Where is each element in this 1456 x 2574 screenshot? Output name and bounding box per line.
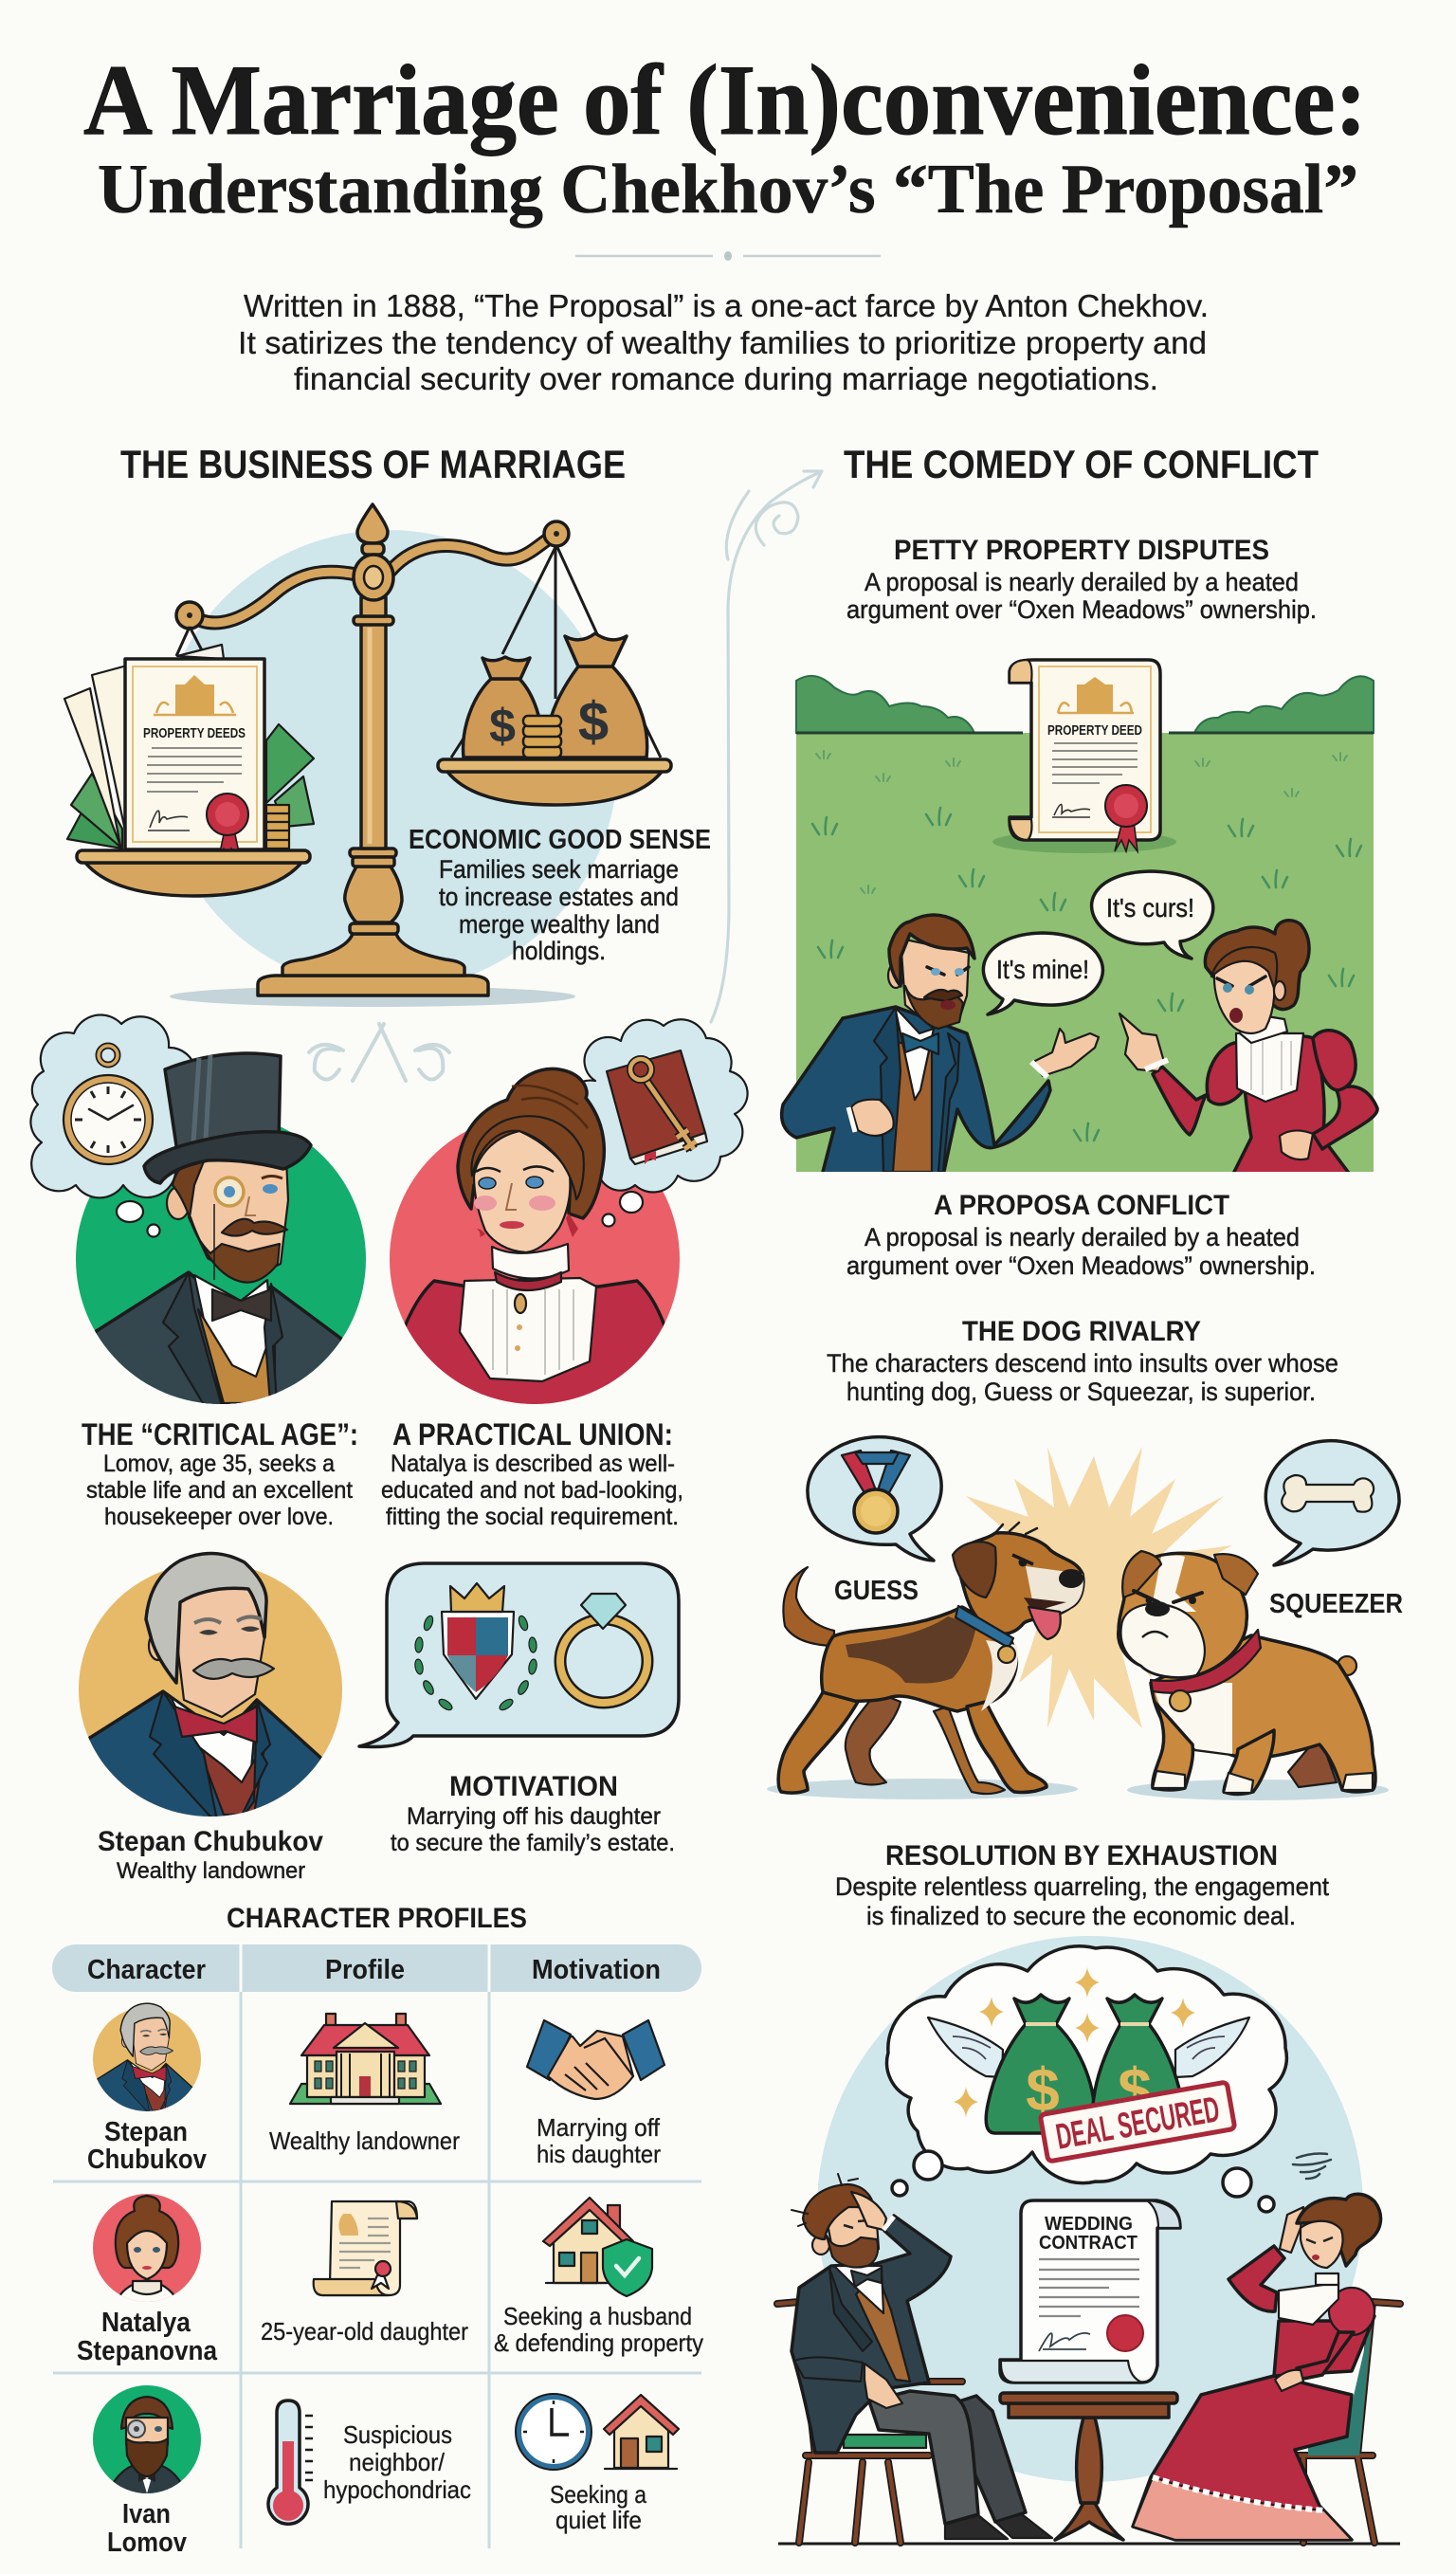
ring — [560, 1594, 647, 1703]
dog: Guess — [778, 1523, 1083, 1794]
text: a practical union: fitting the social requirement. — [386, 1504, 679, 1530]
text: the critical age: THE “CRITICAL AGE”: — [82, 1417, 358, 1451]
text: a practical union — [381, 1417, 683, 1530]
head — [1297, 2194, 1381, 2266]
text: marrying off his daughter — [537, 2113, 661, 2168]
text: the dog rivalry: THE DOG RIVALRY — [962, 1316, 1201, 1347]
text: a proposa conflict — [846, 1190, 1316, 1280]
top hat — [144, 1053, 311, 1183]
chair — [777, 2302, 962, 2543]
chair — [1295, 2302, 1400, 2543]
head and face — [167, 1159, 288, 1283]
dress — [1232, 1036, 1351, 1176]
wedding contract — [1000, 2200, 1180, 2382]
text: economic good sense: ECONOMIC GOOD SENSE — [409, 825, 711, 855]
arrow: flourish linking the two columns — [711, 471, 822, 1022]
text: seeking a husband: Seeking a husband — [503, 2302, 692, 2330]
text: a practical union: educated and not bad-looking, — [381, 1477, 683, 1504]
head — [888, 963, 903, 988]
intro text: financial security over romance during marriage negotiations. — [294, 361, 1158, 396]
text: resolution by exhaustion: RESOLUTION BY EXHAUSTION — [885, 1840, 1278, 1871]
right pan — [438, 759, 671, 805]
text: Stepan Chubukov: Stepan Chubukov — [98, 1826, 323, 1857]
text: suspicious neighbor: neighbor/ — [349, 2448, 446, 2476]
deal secured stamp — [1040, 2082, 1235, 2162]
illustration: balance scale — [64, 504, 671, 1007]
left pan contents: property deeds and money: PROPERTY DEEDS — [143, 726, 246, 741]
property deed scroll: PROPERTY DEED — [1047, 723, 1142, 739]
woman on chair — [1133, 2194, 1400, 2543]
hanging cords — [176, 545, 661, 758]
legs — [1224, 1730, 1274, 1794]
bodice and sleeves — [1274, 2316, 1374, 2376]
speech bubble: medal — [808, 1437, 941, 1561]
text: the critical age — [82, 1417, 358, 1530]
deal secured stamp: DEAL SECURED — [1053, 2090, 1223, 2158]
speech bubble: it's mine — [983, 933, 1102, 1014]
avatar: Lomov — [93, 2385, 201, 2495]
text: the critical age: housekeeper over love. — [104, 1504, 334, 1530]
right pan contents: money bags and coins: $ — [489, 700, 516, 753]
white chest — [1153, 1683, 1232, 1754]
head — [955, 1533, 1083, 1634]
thought cloud: deal secured: $ — [1118, 2055, 1152, 2124]
wings — [928, 2017, 1249, 2077]
red circle — [390, 1114, 680, 1404]
text: motivation — [391, 1771, 675, 1856]
bow tie — [851, 2268, 882, 2287]
text: petty property disputes: A proposal is nearly derailed by a heated — [864, 568, 1299, 596]
text: economic good sense: holdings. — [512, 937, 606, 965]
illustration: meadow dispute scene — [782, 660, 1377, 1176]
text: seeking a quiet life: Seeking a — [550, 2480, 646, 2509]
name: Natalya Stepanovna: Stepanovna — [77, 2336, 218, 2366]
name: Ivan Lomov: Lomov — [107, 2528, 187, 2558]
heading: the comedy of conflict: THE COMEDY OF CONFLICT — [844, 442, 1319, 486]
woman arguing — [1119, 921, 1377, 1176]
icon: clock and house — [516, 2394, 679, 2470]
starburst — [966, 1447, 1232, 1728]
table header row: Character — [87, 1955, 206, 1985]
illustration: resolution scene — [777, 1936, 1400, 2544]
text: petty property disputes — [846, 535, 1317, 624]
hand on lap — [1275, 2370, 1303, 2391]
dog: Squeezer — [1119, 1551, 1375, 1794]
text: Stepan Chubukov — [98, 1826, 323, 1884]
fist — [851, 1100, 894, 1136]
name: Ivan Lomov — [107, 2499, 187, 2558]
left arm and cuff — [1153, 1067, 1206, 1135]
balance beam — [176, 521, 569, 629]
intro text: It satirizes the tendency of wealthy families to prioritize property and — [238, 325, 1207, 360]
table header row: Motivation — [532, 1955, 661, 1985]
title: Understanding Chekhov’s “The Proposal” — [98, 151, 1358, 228]
suit and shirt — [95, 1270, 343, 1404]
icon: certificate scroll — [314, 2201, 417, 2295]
jacket — [792, 2216, 951, 2453]
thought cloud: deal secured: $ — [1026, 2055, 1060, 2124]
head — [1119, 1553, 1247, 1677]
text: motivation: MOTIVATION — [449, 1771, 618, 1802]
head — [812, 2236, 829, 2255]
property deed scroll — [992, 660, 1176, 853]
saddle patch — [846, 1616, 976, 1684]
scale base and pole — [258, 504, 488, 995]
portrait: Natalya Stepanovna — [379, 1019, 748, 1422]
table heading: CHARACTER PROFILES — [227, 1903, 527, 1934]
flounce — [1133, 2477, 1352, 2540]
text: a proposa conflict: A proposal is nearly derailed by a heated — [864, 1223, 1300, 1251]
left pan — [77, 850, 310, 896]
icon: thermometer — [268, 2401, 313, 2524]
text: petty property disputes: argument over “Oxen Meadows” ownership. — [846, 595, 1317, 624]
text: resolution by exhaustion: Despite relentless quarreling, the engagement — [835, 1872, 1329, 1901]
fist — [1280, 1130, 1313, 1159]
right pan contents: money bags and coins: $ — [578, 691, 609, 753]
body — [1151, 1635, 1375, 1792]
icon: handshake — [527, 2020, 664, 2099]
text: a proposa conflict: A PROPOSA CONFLICT — [934, 1190, 1229, 1221]
blue collar — [956, 1606, 1013, 1648]
text: suspicious neighbor: hypochondriac — [323, 2475, 471, 2504]
pointing hand — [1119, 1013, 1164, 1071]
bow tie — [212, 1289, 271, 1321]
far front leg — [934, 1707, 1005, 1794]
text: suspicious neighbor — [323, 2420, 471, 2504]
ground line — [778, 2543, 1400, 2545]
wedding contract: WEDDING — [1045, 2214, 1133, 2235]
far back leg — [1288, 1735, 1337, 1787]
right pan contents: money bags and coins — [464, 633, 647, 758]
text: Stepan Chubukov: Wealthy landowner — [117, 1858, 305, 1884]
text: petty property disputes: PETTY PROPERTY DISPUTES — [894, 535, 1269, 566]
text: economic good sense: merge wealthy land — [459, 910, 660, 939]
intro text — [238, 288, 1209, 396]
body — [822, 1607, 1016, 1711]
red collar — [1151, 1630, 1261, 1693]
heading: the business of marriage: THE BUSINESS OF MARRIAGE — [120, 442, 626, 486]
table header row — [52, 1944, 701, 1992]
wedding contract: CONTRACT — [1039, 2233, 1138, 2254]
hand on head — [851, 2192, 886, 2230]
speech bubble: it's curs: It's curs! — [1106, 893, 1194, 922]
hand on lap — [864, 2364, 902, 2408]
text: the dog rivalry: hunting dog, Guess or Squeezar, is superior. — [846, 1378, 1316, 1406]
grass field — [796, 733, 1374, 1172]
name: Natalya Stepanovna — [77, 2308, 218, 2366]
sparkles — [954, 1967, 1195, 2117]
chest — [981, 1640, 1018, 1711]
name: Stepan Chubukov: Stepan — [104, 2117, 188, 2147]
blue backdrop circle — [157, 530, 618, 991]
round table — [1000, 2393, 1177, 2540]
bushes — [796, 676, 974, 733]
speech bubble: bone — [1265, 1441, 1399, 1565]
hair and face — [458, 1068, 604, 1252]
title: A Marriage of (In)convenience: — [83, 45, 1367, 155]
far back leg — [846, 1692, 901, 1784]
portrait: Stepan Chubukov — [76, 1553, 351, 1830]
speech bubble: it's curs — [1092, 871, 1213, 958]
icon: house with shield — [543, 2198, 652, 2296]
name: Stepan Chubukov: Chubukov — [87, 2145, 207, 2175]
table: character profiles — [52, 1903, 703, 2558]
grass tufts — [812, 751, 1361, 1141]
head and hair — [1205, 921, 1309, 1010]
avatar: Natalya — [93, 2194, 201, 2313]
title — [83, 45, 1367, 228]
text: economic good sense: to increase estates and — [439, 883, 679, 911]
left pan contents: property deeds and money — [64, 645, 314, 857]
forearm — [794, 2357, 863, 2382]
text: a proposa conflict: argument over “Oxen Meadows” ownership. — [846, 1251, 1316, 1280]
green circle — [76, 1114, 366, 1404]
text: the critical age: stable life and an excellent — [86, 1477, 353, 1504]
label: squeezer: SQUEEZER — [1269, 1589, 1403, 1619]
near back leg — [778, 1692, 858, 1793]
man arguing — [782, 915, 1099, 1176]
text: seeking a quiet life — [550, 2480, 646, 2534]
text: the dog rivalry — [827, 1316, 1338, 1406]
avatar: Stepan — [92, 2003, 205, 2117]
trousers — [869, 2391, 1026, 2524]
text: motivation: to secure the family’s estate. — [391, 1830, 675, 1856]
text: wealthy landowner: Wealthy landowner — [269, 2127, 460, 2155]
illustration: dog rivalry — [767, 1437, 1403, 1800]
skirt — [1133, 2376, 1352, 2540]
near front leg — [967, 1702, 1046, 1792]
text: 25-year-old daughter: 25-year-old daughter — [261, 2317, 468, 2346]
text: the dog rivalry: The characters descend into insults over whose — [827, 1349, 1338, 1378]
tail — [783, 1567, 834, 1646]
text: seeking a husband: & defending property — [494, 2328, 703, 2357]
shoes — [945, 2514, 1052, 2539]
text: economic good sense — [409, 825, 711, 965]
name: Ivan Lomov: Ivan — [122, 2499, 171, 2529]
lace collar — [492, 1244, 569, 1279]
open hand — [1033, 1029, 1099, 1076]
thought cloud: deal secured — [887, 1946, 1286, 2212]
ground shadows — [767, 1779, 1078, 1799]
speech bubble: crest and wedding ring — [359, 1563, 679, 1747]
text: motivation: Marrying off his daughter — [407, 1803, 661, 1830]
text: suspicious neighbor: Suspicious — [343, 2420, 452, 2449]
text: resolution by exhaustion — [835, 1840, 1329, 1930]
name: Stepan Chubukov — [87, 2117, 207, 2175]
text: resolution by exhaustion: is finalized to secure the economic deal. — [866, 1902, 1296, 1930]
text: seeking a husband — [494, 2302, 703, 2357]
text: economic good sense: Families seek marriage — [439, 855, 679, 884]
text: a practical union: A PRACTICAL UNION: — [392, 1417, 673, 1451]
man on chair — [777, 2174, 1052, 2543]
dress and bib — [404, 1276, 665, 1404]
text: a practical union: Natalya is described as well- — [391, 1451, 675, 1477]
table header row: Profile — [325, 1955, 405, 1985]
text: marrying off his daughter: his daughter — [537, 2140, 661, 2168]
text: seeking a quiet life: quiet life — [555, 2506, 642, 2534]
label: guess: GUESS — [834, 1576, 919, 1606]
name: Natalya Stepanovna: Natalya — [101, 2308, 191, 2338]
blue backdrop circle — [817, 1936, 1363, 2482]
jacket — [782, 1007, 1050, 1176]
hand on head — [1280, 2207, 1303, 2253]
thought cloud: pocket watch — [30, 1015, 200, 1197]
bib — [1279, 2283, 1338, 2325]
speech bubble: it's mine: It's mine! — [996, 955, 1089, 984]
icon: mansion — [290, 2014, 441, 2104]
intro text: Written in 1888, “The Proposal” is a one-act farce by Anton Chekhov. — [244, 288, 1209, 323]
portrait: Ivan Lomov — [30, 1015, 366, 1422]
crest — [414, 1583, 537, 1712]
money bags — [986, 2024, 1095, 2133]
thought cloud: book and key — [562, 1019, 748, 1192]
text: the critical age: Lomov, age 35, seeks a — [103, 1451, 335, 1477]
text: marrying off his daughter: Marrying off — [537, 2113, 661, 2142]
